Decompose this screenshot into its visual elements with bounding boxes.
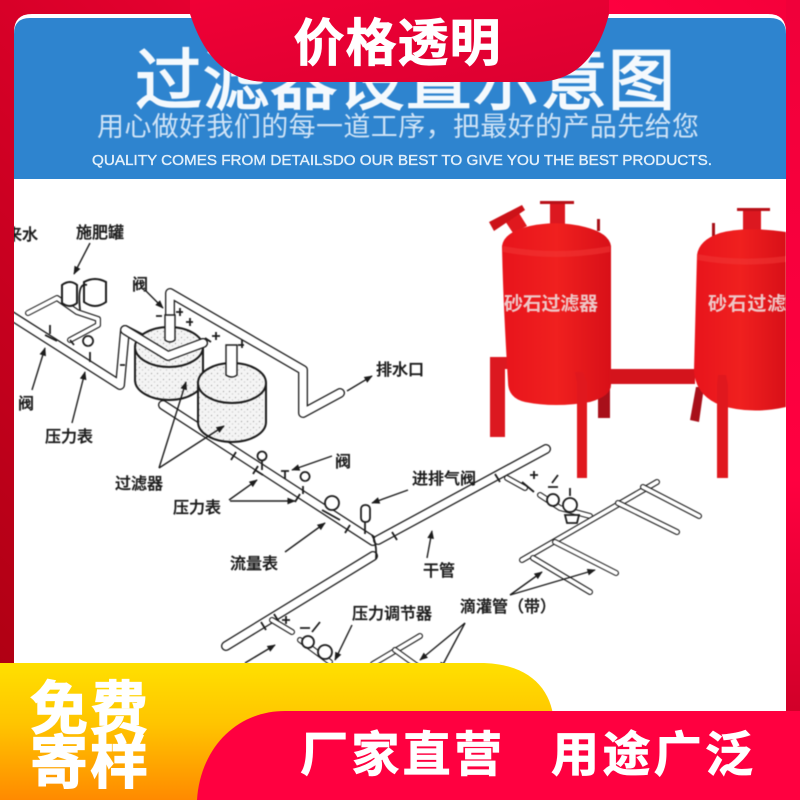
panel: red bottom banner <box>197 711 800 800</box>
diagram labels: 进排气阀 <box>412 470 476 488</box>
banner text: 用途广泛 <box>551 729 753 782</box>
diagram labels: 滴灌管（带） <box>460 597 556 616</box>
icon: filter tank one <box>125 308 203 400</box>
diagram labels: 流量表 <box>230 555 278 573</box>
icon: filter tank two <box>198 332 266 442</box>
leader arrows <box>32 243 595 670</box>
panel: blue header <box>14 14 786 179</box>
banner text <box>300 729 753 782</box>
white content area <box>14 178 786 712</box>
icon: fertilizer tanks <box>62 279 106 310</box>
diagram labels: 施肥罐 <box>76 224 124 242</box>
upstream pipe and fertilizer bypass <box>10 298 203 385</box>
diagram labels: 过滤器 <box>115 475 163 493</box>
sand filter tank right: 砂石过滤 <box>708 293 786 315</box>
diagram labels: 排水口 <box>376 361 424 379</box>
trunk pipe <box>226 449 546 646</box>
diagram labels: 阀 <box>132 276 148 294</box>
diagram labels: 阀 <box>335 453 351 471</box>
connecting pipe <box>610 369 695 384</box>
lower branch <box>272 616 420 668</box>
gauges, valves and flow meter <box>255 452 370 534</box>
diagram labels: 阀 <box>18 395 34 413</box>
photo: red sand filters <box>489 201 786 478</box>
header english line: QUALITY COMES FROM DETAILSDO OUR BEST TO GIVE YOU THE BEST PRODUCTS. <box>92 152 712 169</box>
diagram labels: 压力表 <box>45 428 93 446</box>
diagram labels <box>6 224 556 623</box>
diagram labels: 压力表 <box>173 499 221 517</box>
header subtitle: 用心做好我们的每一道工序，把最好的产品先给您 <box>97 112 699 142</box>
free sample text: 免费 <box>30 677 148 742</box>
drain pipe <box>170 293 340 413</box>
diagram labels: 压力调节器 <box>352 605 432 623</box>
header title: 过滤器设置示意图 <box>135 44 675 119</box>
sand filter tank right <box>690 208 786 478</box>
red price tab <box>190 0 609 82</box>
free sample text: 寄样 <box>30 731 148 796</box>
diagram labels: 来水 <box>6 226 38 244</box>
free sample text <box>30 677 148 796</box>
diagram labels: 干管 <box>423 561 455 580</box>
banner text: 厂家直营 <box>300 729 502 782</box>
sand filter tank left: 砂石过滤器 <box>504 293 598 315</box>
panel: yellow free sample badge <box>0 663 554 800</box>
lower manifold pipe <box>163 405 373 541</box>
right branch and laterals <box>507 471 699 592</box>
sand filter tank left <box>489 201 611 478</box>
tab text: 价格透明 <box>294 15 500 72</box>
irrigation system diagram <box>6 224 699 670</box>
